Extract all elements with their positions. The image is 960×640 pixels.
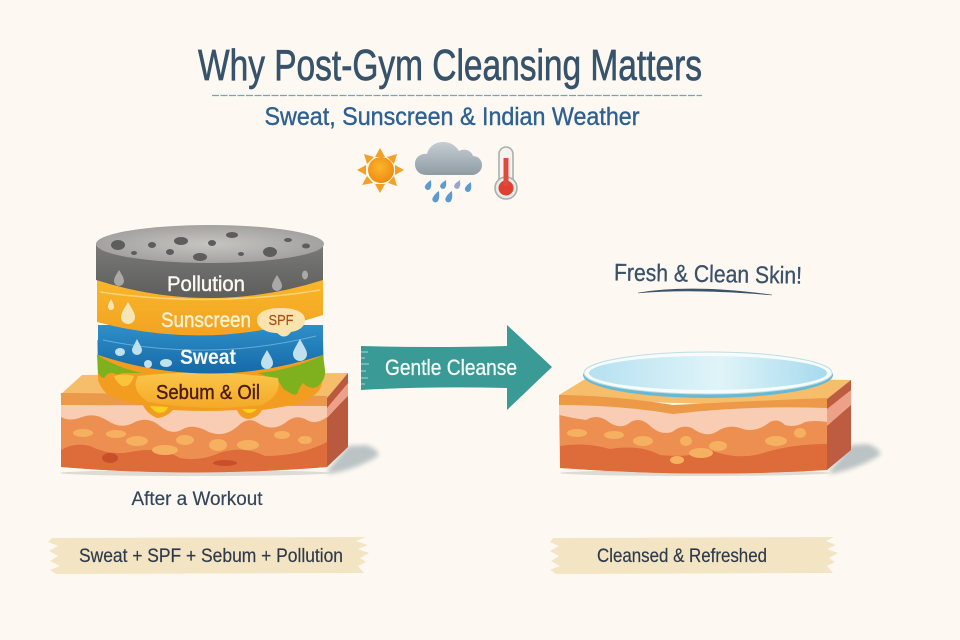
layer: pollution [96,225,324,298]
banner: after summary: Cleansed & Refreshed [597,546,767,567]
icon: rain cloud [415,142,482,202]
label: spf: SPF [268,312,294,329]
banner: after summary [550,537,838,574]
illustration: skin block, before [60,373,378,476]
icon: sun [357,148,404,193]
layer: sunscreen [97,280,323,336]
caption: after a workout: After a Workout [132,489,263,510]
title divider [212,94,702,96]
illustration: skin block, after [559,352,880,476]
heading: fresh and clean skin: Fresh & Clean Skin! [614,259,802,290]
title: Why Post-Gym Cleansing Matters [198,41,702,90]
layer: sebum and oil [97,340,325,419]
illustration: layered residue stack [96,225,325,419]
arrow: gentle cleanse [361,325,552,410]
label: pollution: Pollution [167,273,245,296]
label: sweat: Sweat [180,346,236,369]
water film [583,352,833,398]
banner: before summary [48,537,369,574]
layer: sweat [98,325,323,374]
label: sebum and oil: Sebum & Oil [156,382,260,404]
banner: before summary: Sweat + SPF + Sebum + Pollution [79,546,343,567]
icon: thermometer [495,147,517,199]
underline swoosh [638,289,772,295]
subtitle: Sweat, Sunscreen & Indian Weather [264,103,640,131]
label: sunscreen: Sunscreen [161,309,251,332]
arrow label: Gentle Cleanse [385,355,517,380]
